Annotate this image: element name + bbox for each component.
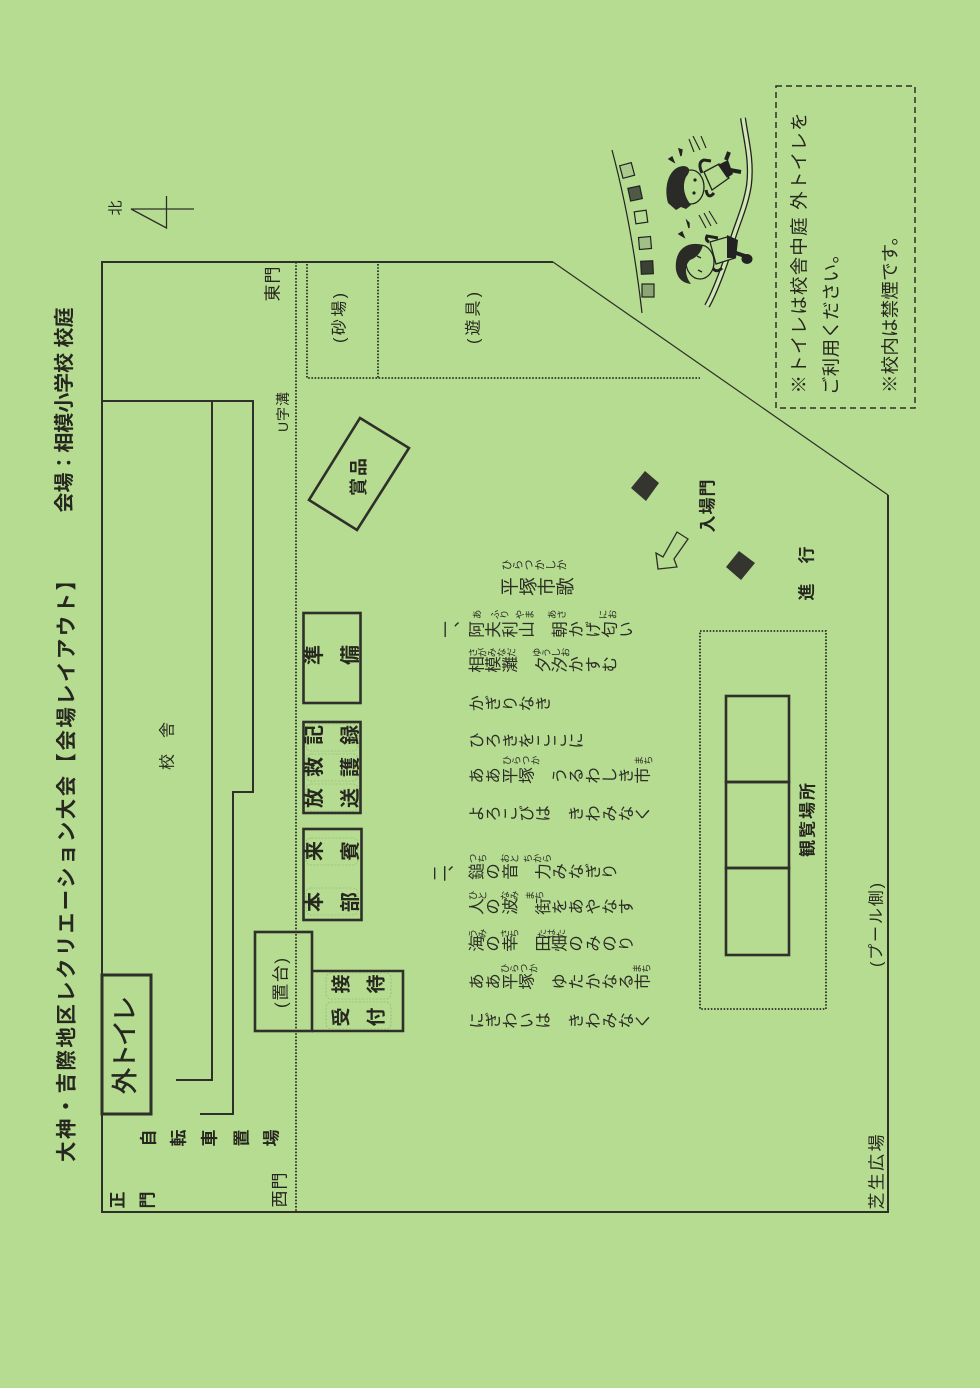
reception and hospitality tent: 付 <box>366 1007 388 1027</box>
verse one: よろこびは きわみなく <box>468 806 651 824</box>
verse two: まち <box>632 964 651 976</box>
verse one: やま <box>515 610 534 622</box>
bicycle parking <box>138 1130 282 1146</box>
bicycle parking: 自 <box>138 1130 158 1146</box>
child two <box>676 211 752 284</box>
verse two: にぎわいは きわみなく <box>468 1012 651 1032</box>
broadcast, first aid, records tent: 送 <box>339 788 362 808</box>
outdoor toilet <box>102 975 151 1114</box>
song title: ひらつかしか <box>501 560 567 572</box>
bicycle parking: 置 <box>232 1130 252 1146</box>
pool side label: (プール側) <box>868 883 886 967</box>
verse one: ゆうしお <box>532 648 570 660</box>
verse two: つち <box>468 854 487 866</box>
notice box: ご利用ください。 <box>820 245 842 395</box>
verse two: ひと <box>468 892 487 902</box>
verse two: 海の幸 田畑のみのり <box>468 935 634 954</box>
verse one: 相模灘 夕汐かすむ <box>468 656 617 676</box>
verse one: さがみなだ <box>468 648 516 660</box>
west gate: 西門 <box>270 1172 290 1208</box>
verse one: ひろきをここに <box>468 732 584 752</box>
progress label: 進 <box>798 584 816 600</box>
verse two: 鎚の音 力みなぎり <box>468 863 617 882</box>
broadcast, first aid, records tent <box>303 722 362 813</box>
play area: (遊具) <box>464 292 482 344</box>
U-shaped drain line: U字溝 <box>275 392 291 432</box>
verse two: ちから <box>523 854 552 866</box>
guests and headquarters tent <box>303 829 362 920</box>
school building <box>102 401 253 1114</box>
venue: 会場：相模小学校 校庭 <box>53 308 76 512</box>
main gate: 正 <box>108 1192 128 1208</box>
title: 大神・吉際地区レクリエーション大会【会場レイアウト】 <box>56 570 78 1162</box>
play area <box>307 264 700 378</box>
verse two: まち <box>525 892 544 902</box>
broadcast, first aid, records tent: 録 <box>339 725 362 745</box>
verse one: ひらつか <box>502 756 540 768</box>
broadcast, first aid, records tent: 救 <box>303 757 326 777</box>
prizes tent: 賞 <box>349 478 369 496</box>
verse one: ふり <box>490 610 509 622</box>
broadcast, first aid, records tent: 護 <box>339 757 362 777</box>
verse two: ひらつか <box>500 964 538 976</box>
notice box <box>776 86 915 408</box>
guests and headquarters tent: 来 <box>303 841 326 861</box>
verse one: 一、 <box>437 621 470 640</box>
broadcast, first aid, records tent: 記 <box>304 725 326 745</box>
course line <box>707 118 750 306</box>
verse two: 二、 <box>431 865 464 884</box>
prizes tent <box>309 418 409 530</box>
site outline <box>102 262 888 1212</box>
verse two: たはた <box>537 929 566 940</box>
outdoor toilet: 外トイレ <box>110 996 140 1094</box>
school building: 校 <box>158 754 176 770</box>
progress label: 行 <box>798 546 816 564</box>
guests and headquarters tent: 賓 <box>338 841 362 861</box>
verse two: うみ <box>468 929 487 940</box>
entrance gate: 入場門 <box>698 480 718 532</box>
song title: 平塚市歌 <box>500 576 575 598</box>
child one <box>666 136 741 210</box>
notice box: ※校内は禁煙です。 <box>880 227 900 393</box>
preparation tent <box>303 613 362 703</box>
verse one: にお <box>598 610 617 622</box>
platform: (置台) <box>272 958 290 1008</box>
notice box: ※トイレは校舎中庭 外トイレを <box>788 112 810 394</box>
reception and hospitality tent <box>312 971 403 1031</box>
east gate: 東門 <box>264 266 282 302</box>
icon: north arrow: 北 <box>108 200 124 216</box>
lawn plaza label: 芝生広場 <box>868 1134 886 1210</box>
play area: (砂場) <box>330 293 348 343</box>
broadcast, first aid, records tent: 放 <box>303 788 326 808</box>
guests and headquarters tent: 本 <box>303 892 326 912</box>
verse one: ああ平塚 うるわしき市 <box>468 767 651 786</box>
verse one: 阿夫利山 朝かげ匂い <box>468 621 634 640</box>
main gate <box>108 1192 158 1208</box>
verse two <box>431 854 651 1032</box>
reception and hospitality tent: 待 <box>366 974 388 994</box>
main gate: 門 <box>138 1192 158 1208</box>
progress label <box>798 546 816 600</box>
reception and hospitality tent: 接 <box>330 974 352 994</box>
school building: 舎 <box>158 722 176 738</box>
guests and headquarters tent: 部 <box>339 892 362 912</box>
bicycle parking: 車 <box>200 1130 220 1146</box>
verse one: かぎりなき <box>468 696 551 714</box>
platform <box>255 932 312 1031</box>
city song lyrics <box>431 560 653 1032</box>
reception and hospitality tent: 受 <box>330 1007 352 1027</box>
verse one: まち <box>634 756 653 768</box>
flag string <box>612 150 654 313</box>
verse two: さち <box>500 930 519 940</box>
preparation tent: 備 <box>339 645 362 665</box>
bicycle parking: 転 <box>170 1130 188 1146</box>
verse two: ああ平塚 ゆたかなる市 <box>468 973 651 992</box>
verse two: おと <box>500 854 519 866</box>
spectator area: 観覧場所 <box>798 783 818 857</box>
entrance gate <box>631 471 755 580</box>
arrow: entrance direction <box>656 532 688 569</box>
illustration: children running <box>612 118 752 313</box>
icon: north arrow <box>108 196 194 228</box>
preparation tent: 準 <box>303 645 326 665</box>
verse one: あ <box>472 610 482 622</box>
prizes tent: 品 <box>349 458 369 476</box>
bicycle parking: 場 <box>262 1130 282 1146</box>
verse two: なみ <box>500 891 519 902</box>
spectator area <box>700 631 826 1009</box>
verse one <box>437 610 653 824</box>
verse two: 人の波 街をあやなす <box>468 898 634 918</box>
verse one: あさ <box>547 610 566 622</box>
song title <box>500 560 575 598</box>
